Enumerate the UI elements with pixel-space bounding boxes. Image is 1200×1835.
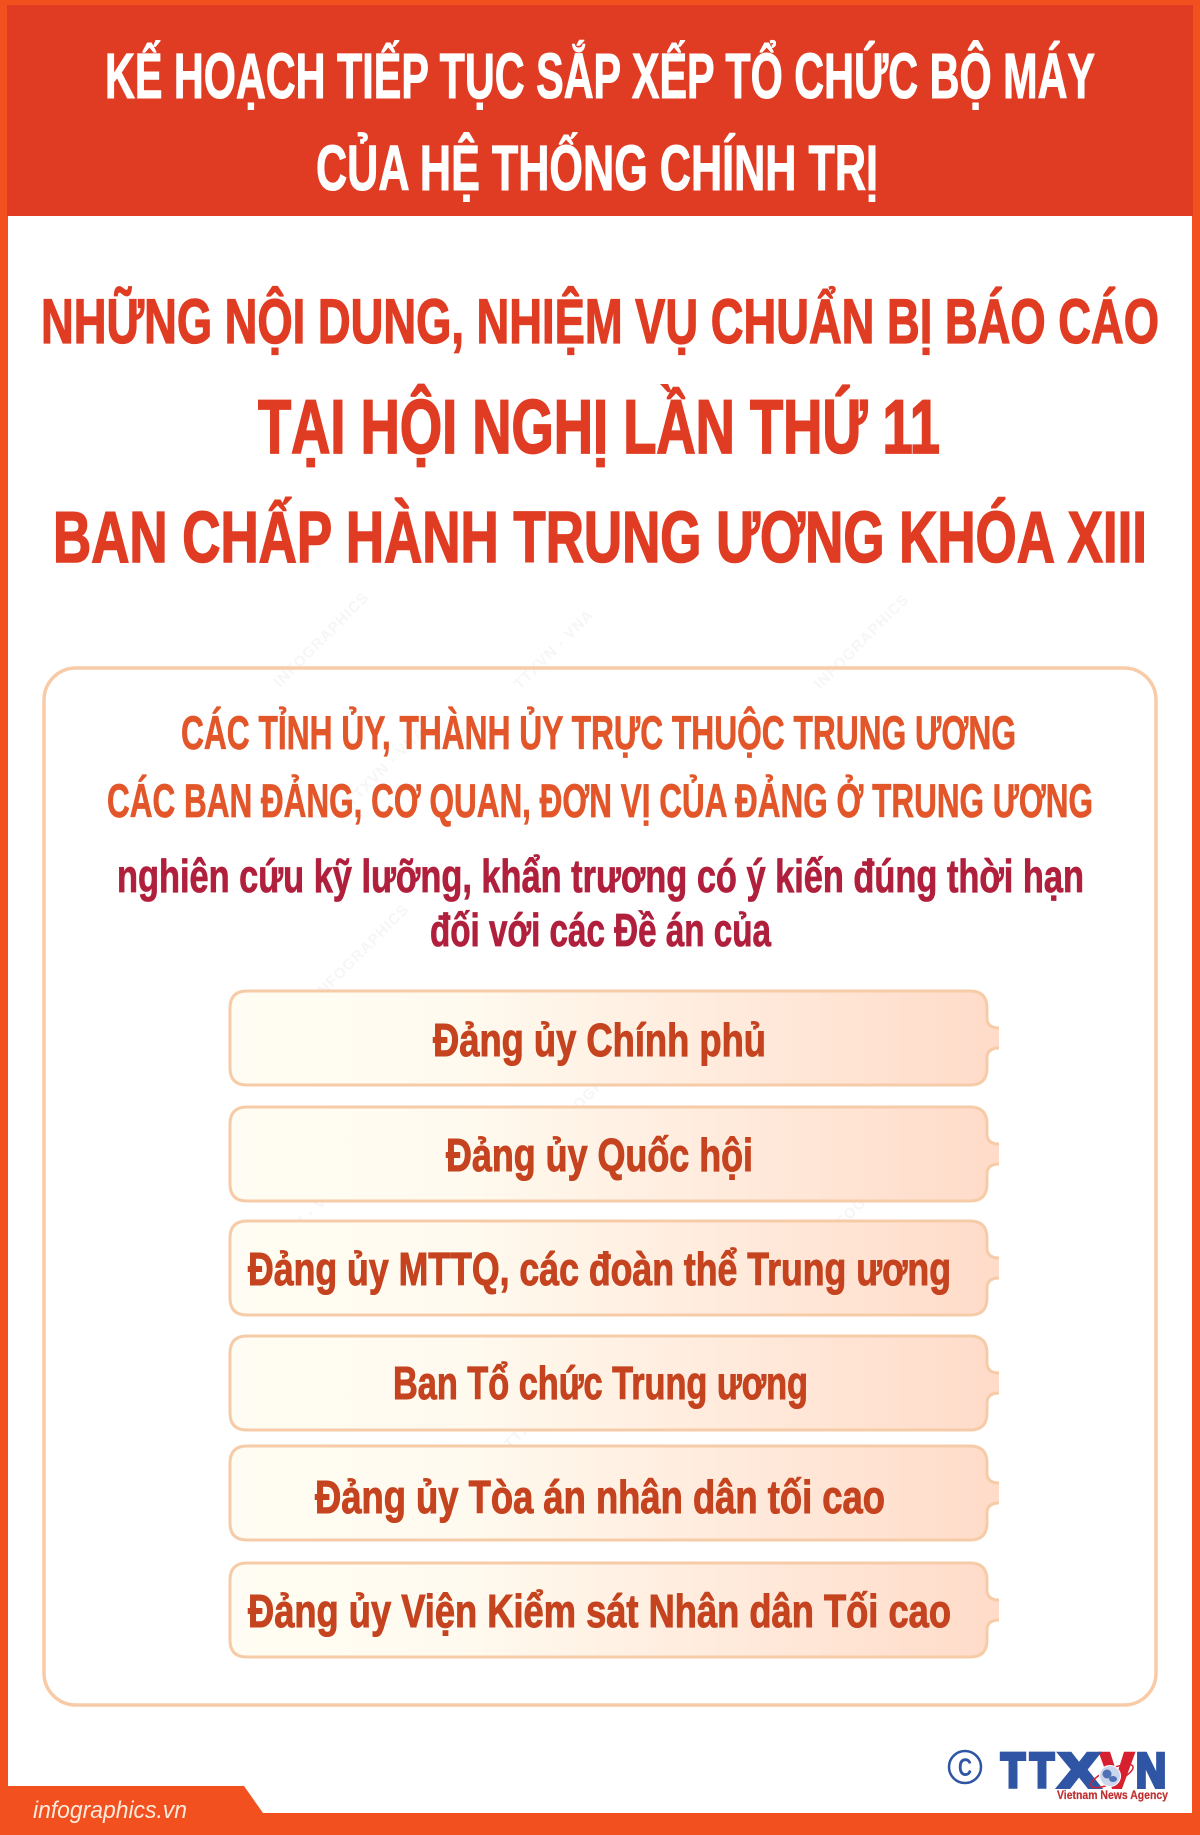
logo: TTXVN Vietnam News Agency: N	[1136, 1745, 1166, 1798]
box: Đảng ủy Tòa án nhân dân tối cao	[230, 1446, 999, 1540]
box: Đảng ủy Viện Kiểm sát Nhân dân Tối cao: Đảng ủy Viện Kiểm sát Nhân dân Tối cao	[248, 1585, 951, 1637]
logo: TTXVN Vietnam News Agency: Vietnam News Agency	[1057, 1790, 1169, 1802]
main heading	[41, 286, 1159, 578]
heading line 2: TẠI HỘI NGHỊ LẦN THỨ 11	[258, 385, 940, 470]
icon: copyright symbol	[949, 1751, 981, 1783]
icon: copyright symbol: C	[958, 1754, 972, 1782]
box: Đảng ủy Quốc hội	[230, 1107, 999, 1201]
title banner	[7, 5, 1193, 216]
panel: party committees and projects	[44, 668, 1156, 1705]
box: Ban Tổ chức Trung ương: Ban Tổ chức Trung ương	[393, 1357, 808, 1409]
box: Đảng ủy Viện Kiểm sát Nhân dân Tối cao	[230, 1563, 999, 1657]
text: INFOGRAPHICS	[551, 1031, 653, 1133]
box: Đảng ủy Chính phủ	[230, 991, 999, 1085]
panel subheading line 2: đối với các Đề án của	[430, 904, 771, 956]
box: Đảng ủy Tòa án nhân dân tối cao: Đảng ủy Tòa án nhân dân tối cao	[315, 1471, 885, 1523]
text: INFOGRAPHICS	[821, 1141, 923, 1243]
text: TTXVN - VNA	[343, 723, 429, 810]
box: Đảng ủy MTTQ	[230, 1221, 999, 1315]
logo: TTXVN Vietnam News Agency: T	[1001, 1745, 1025, 1798]
text: INFOGRAPHICS	[311, 901, 413, 1003]
logo: TTXVN Vietnam News Agency: X	[1059, 1745, 1099, 1798]
logo: TTXVN Vietnam News Agency: V	[1101, 1745, 1133, 1798]
box: Đảng ủy MTTQ: Đảng ủy MTTQ, các đoàn thể Trung ương	[248, 1243, 951, 1295]
box: Ban Tổ chức Trung ương	[230, 1336, 999, 1430]
footer site label: infographics.vn	[33, 1797, 187, 1824]
logo: TTXVN Vietnam News Agency	[1001, 1745, 1169, 1802]
icon: globe with orbit	[1088, 1760, 1136, 1792]
logo: TTXVN Vietnam News Agency: T	[1030, 1745, 1054, 1798]
text: TTXVN - VNA	[501, 1366, 587, 1453]
text: TTXVN - VNA	[511, 606, 597, 693]
box: Đảng ủy Chính phủ: Đảng ủy Chính phủ	[433, 1014, 766, 1066]
text: INFOGRAPHICS	[271, 589, 373, 691]
text: INFOGRAPHICS	[811, 591, 913, 693]
box: Đảng ủy Quốc hội: Đảng ủy Quốc hội	[446, 1129, 753, 1181]
title line 2: CỦA HỆ THỐNG CHÍNH TRỊ	[316, 131, 878, 204]
text: TTXVN - VNA	[261, 1176, 347, 1263]
